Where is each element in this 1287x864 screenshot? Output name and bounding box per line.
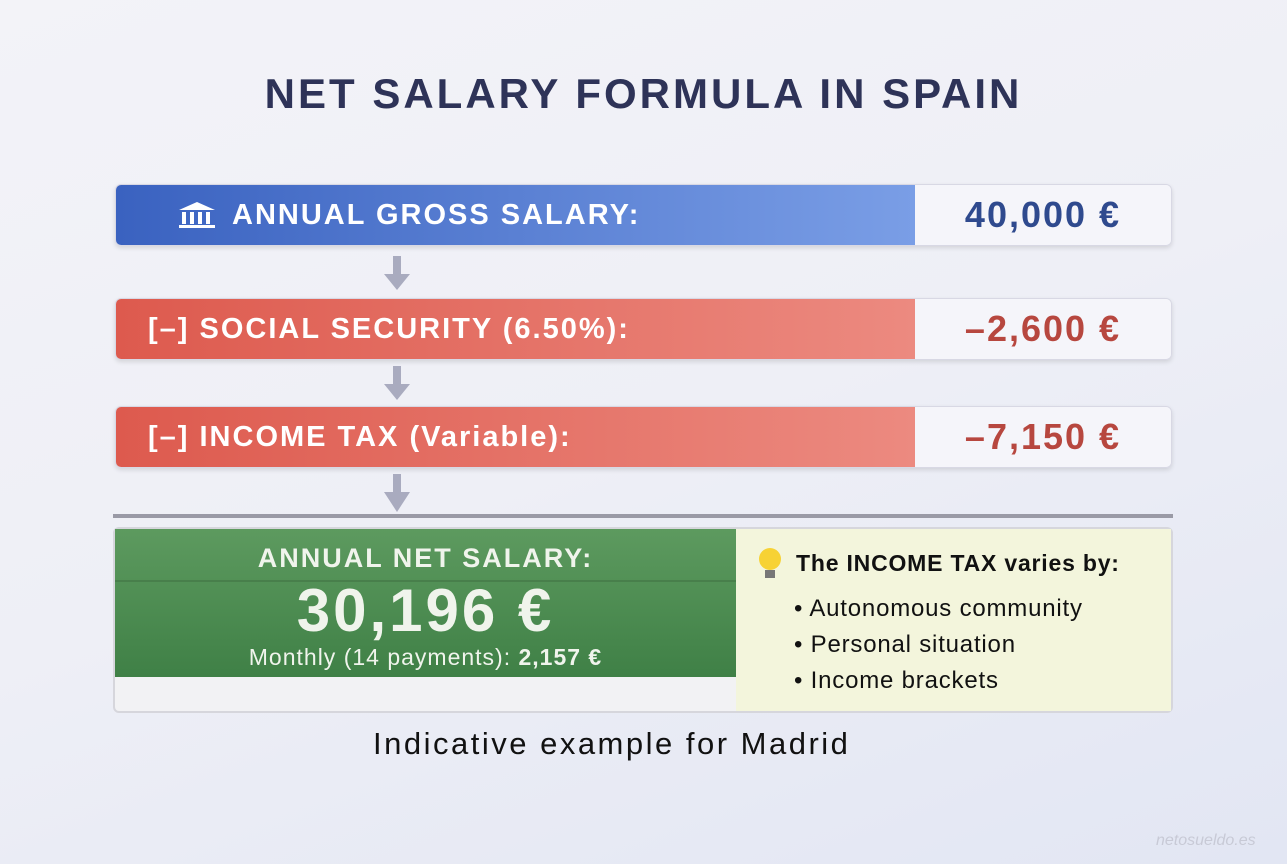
social security label: [–] SOCIAL SECURITY (6.50%): (148, 312, 630, 344)
arrow 2 (384, 366, 410, 400)
gross label (116, 185, 917, 245)
tax heading: The INCOME TAX varies by: (796, 550, 1120, 576)
tax list (794, 595, 1083, 694)
panel: tax factors (736, 529, 1171, 711)
net value: 30,196 € (297, 577, 554, 644)
social security label (116, 299, 917, 359)
tax list: • Personal situation (794, 631, 1016, 658)
bar: gross salary (115, 184, 1172, 246)
title: NET SALARY FORMULA IN SPAIN (265, 70, 1022, 117)
panel: result (113, 527, 1173, 713)
arrow 1 (384, 256, 410, 290)
net salary box (115, 529, 736, 677)
tax list: • Income brackets (794, 667, 999, 694)
income tax value (915, 407, 1171, 467)
gross value: 40,000 € (965, 194, 1121, 235)
gross label: ANNUAL GROSS SALARY: (232, 198, 640, 230)
net label: ANNUAL NET SALARY: (258, 543, 593, 573)
monthly: Monthly (14 payments): 2,157 € (249, 644, 602, 670)
divider line (113, 514, 1173, 518)
watermark: netosueldo.es (1156, 832, 1256, 849)
arrow 3 (384, 474, 410, 512)
bar: social security (115, 298, 1172, 360)
income tax label: [–] INCOME TAX (Variable): (148, 420, 572, 452)
gross value (915, 185, 1171, 245)
income tax label (116, 407, 917, 467)
bar: income tax (115, 406, 1172, 468)
footnote: Indicative example for Madrid (373, 726, 850, 761)
tax list: • Autonomous community (794, 595, 1083, 622)
social security value: –2,600 € (965, 308, 1121, 349)
income tax value: –7,150 € (965, 416, 1121, 457)
social security value (915, 299, 1171, 359)
